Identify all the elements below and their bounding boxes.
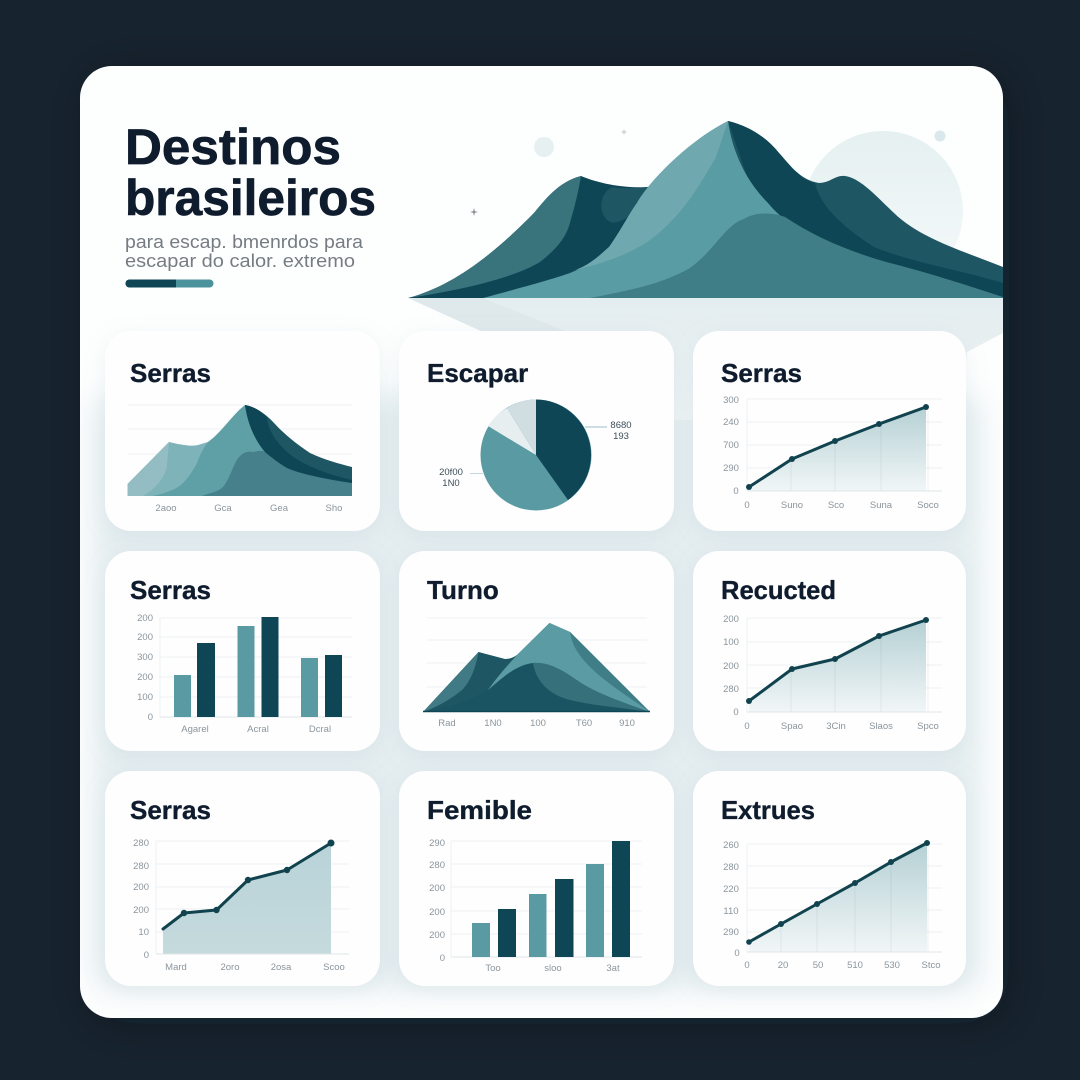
axis labels: Soco bbox=[917, 500, 939, 511]
axis labels: sloo bbox=[544, 963, 562, 974]
axis labels bbox=[723, 840, 941, 971]
x axis labels: Gca bbox=[214, 503, 232, 514]
hero mountain illustration bbox=[408, 121, 1003, 298]
axis labels: 280 bbox=[723, 862, 739, 873]
axis labels bbox=[723, 614, 939, 732]
line chart bbox=[746, 840, 942, 952]
axis labels: 10 bbox=[138, 927, 149, 938]
axis labels bbox=[429, 838, 620, 974]
axis labels: 290 bbox=[723, 463, 739, 474]
axis labels: 0 bbox=[148, 712, 153, 723]
axis labels: 100 bbox=[137, 692, 153, 703]
subtitle: para escap. bmenrdos para bbox=[125, 232, 364, 252]
axis labels: 200 bbox=[137, 632, 153, 643]
title: Destinos bbox=[125, 119, 341, 175]
layered area chart bbox=[128, 405, 352, 496]
x axis labels: Sho bbox=[326, 503, 342, 514]
axis labels: 3at bbox=[606, 963, 620, 974]
subtitle bbox=[125, 232, 364, 271]
panel: Femible bar chart bbox=[399, 771, 674, 986]
axis labels: 0 bbox=[744, 960, 750, 971]
axis labels: 280 bbox=[133, 861, 149, 872]
axis labels: 20 bbox=[778, 960, 788, 971]
axis labels: 200 bbox=[429, 907, 445, 918]
axis labels: 290 bbox=[723, 927, 739, 938]
axis labels: 200 bbox=[137, 672, 153, 683]
axis labels: Slaos bbox=[869, 721, 893, 732]
pie labels: 8680 bbox=[610, 420, 632, 431]
axis labels: 2oro bbox=[220, 962, 240, 973]
axis labels: 700 bbox=[723, 440, 739, 451]
axis labels: 280 bbox=[723, 684, 739, 695]
axis labels: 100 bbox=[723, 637, 739, 648]
x axis labels: 2aoo bbox=[155, 503, 177, 514]
axis labels: 0 bbox=[144, 950, 149, 961]
panel: Serras bar chart bbox=[105, 551, 380, 751]
axis labels: 220 bbox=[723, 884, 739, 895]
x axis labels bbox=[155, 503, 342, 514]
pie chart bbox=[480, 400, 592, 510]
pie labels bbox=[439, 420, 632, 489]
axis labels: Stco bbox=[921, 960, 941, 971]
sun circle bbox=[803, 131, 963, 291]
panel: Serras filled line chart bbox=[105, 771, 380, 986]
axis labels: Scoo bbox=[323, 962, 345, 973]
axis labels: Spao bbox=[781, 721, 803, 732]
axis labels: 510 bbox=[847, 960, 863, 971]
axis labels: 0 bbox=[733, 486, 739, 497]
axis labels: 240 bbox=[723, 417, 739, 428]
pie labels: 193 bbox=[613, 431, 629, 442]
axis labels: 0 bbox=[744, 721, 750, 732]
bar chart bbox=[451, 841, 642, 957]
bar chart bbox=[160, 617, 352, 717]
pie labels: 1N0 bbox=[442, 478, 460, 489]
x axis labels bbox=[438, 718, 635, 729]
axis labels: Sco bbox=[828, 500, 844, 511]
axis labels bbox=[723, 395, 939, 511]
subtitle: escapar do calor. extremo bbox=[125, 251, 355, 271]
mountain reflection bbox=[408, 298, 1003, 420]
axis labels: Mard bbox=[165, 962, 187, 973]
axis labels: 0 bbox=[733, 707, 739, 718]
tinted area behind cards bbox=[92, 395, 982, 990]
title bbox=[125, 119, 376, 226]
axis labels: 200 bbox=[723, 661, 739, 672]
accent bar bbox=[126, 280, 214, 288]
mountain chart bbox=[423, 618, 650, 712]
panel: Recucted line chart bbox=[693, 551, 966, 751]
heading: Extrues bbox=[721, 795, 815, 825]
x axis labels: Rad bbox=[438, 718, 456, 729]
axis labels: 0 bbox=[744, 500, 750, 511]
axis labels: 200 bbox=[429, 883, 445, 894]
axis labels: 200 bbox=[137, 613, 153, 624]
heading: Serras bbox=[130, 358, 211, 388]
axis labels: 200 bbox=[429, 930, 445, 941]
axis labels: 200 bbox=[133, 882, 149, 893]
x axis labels: Gea bbox=[270, 503, 289, 514]
axis labels: Suna bbox=[870, 500, 893, 511]
axis labels: Agarel bbox=[181, 724, 209, 735]
axis labels: Too bbox=[485, 963, 501, 974]
axis labels: 3Cin bbox=[826, 721, 846, 732]
pie labels: 20f00 bbox=[439, 467, 463, 478]
axis labels: 530 bbox=[884, 960, 900, 971]
axis labels: 0 bbox=[440, 953, 445, 964]
panel: Extrues line chart bbox=[693, 771, 966, 986]
panel: Turno mountain chart bbox=[399, 551, 674, 751]
decorative dots and sparkles bbox=[470, 129, 946, 216]
axis labels: 280 bbox=[133, 838, 149, 849]
axis labels: Spco bbox=[917, 721, 939, 732]
axis labels: 0 bbox=[734, 948, 740, 959]
axis labels bbox=[133, 838, 345, 973]
axis labels bbox=[137, 613, 331, 735]
heading: Serras bbox=[130, 795, 211, 825]
line chart bbox=[746, 399, 942, 491]
line chart bbox=[156, 840, 349, 954]
axis labels: 280 bbox=[429, 860, 445, 871]
axis labels: 110 bbox=[723, 906, 739, 917]
heading: Serras bbox=[130, 575, 211, 605]
axis labels: 200 bbox=[133, 905, 149, 916]
panel: Serras mountain area chart bbox=[105, 331, 380, 531]
heading: Turno bbox=[427, 575, 499, 605]
panel: Serras line chart bbox=[693, 331, 966, 531]
heading: Serras bbox=[721, 358, 802, 388]
x axis labels: 1N0 bbox=[484, 718, 502, 729]
heading: Escapar bbox=[427, 358, 528, 388]
title: brasileiros bbox=[125, 170, 376, 226]
panel: Escapar pie chart bbox=[399, 331, 674, 531]
axis labels: 300 bbox=[137, 652, 153, 663]
axis labels: 290 bbox=[429, 838, 445, 849]
axis labels: 260 bbox=[723, 840, 739, 851]
x axis labels: 100 bbox=[530, 718, 546, 729]
line chart bbox=[746, 617, 942, 712]
main panel bbox=[80, 66, 1003, 1018]
heading: Femible bbox=[427, 795, 532, 825]
axis labels: 300 bbox=[723, 395, 739, 406]
axis labels: Suno bbox=[781, 500, 803, 511]
axis labels: 2osa bbox=[271, 962, 292, 973]
x axis labels: 910 bbox=[619, 718, 635, 729]
axis labels: Acral bbox=[247, 724, 269, 735]
heading: Recucted bbox=[721, 575, 836, 605]
x axis labels: T60 bbox=[576, 718, 592, 729]
axis labels: 200 bbox=[723, 614, 739, 625]
axis labels: 50 bbox=[813, 960, 823, 971]
axis labels: Dcral bbox=[309, 724, 331, 735]
